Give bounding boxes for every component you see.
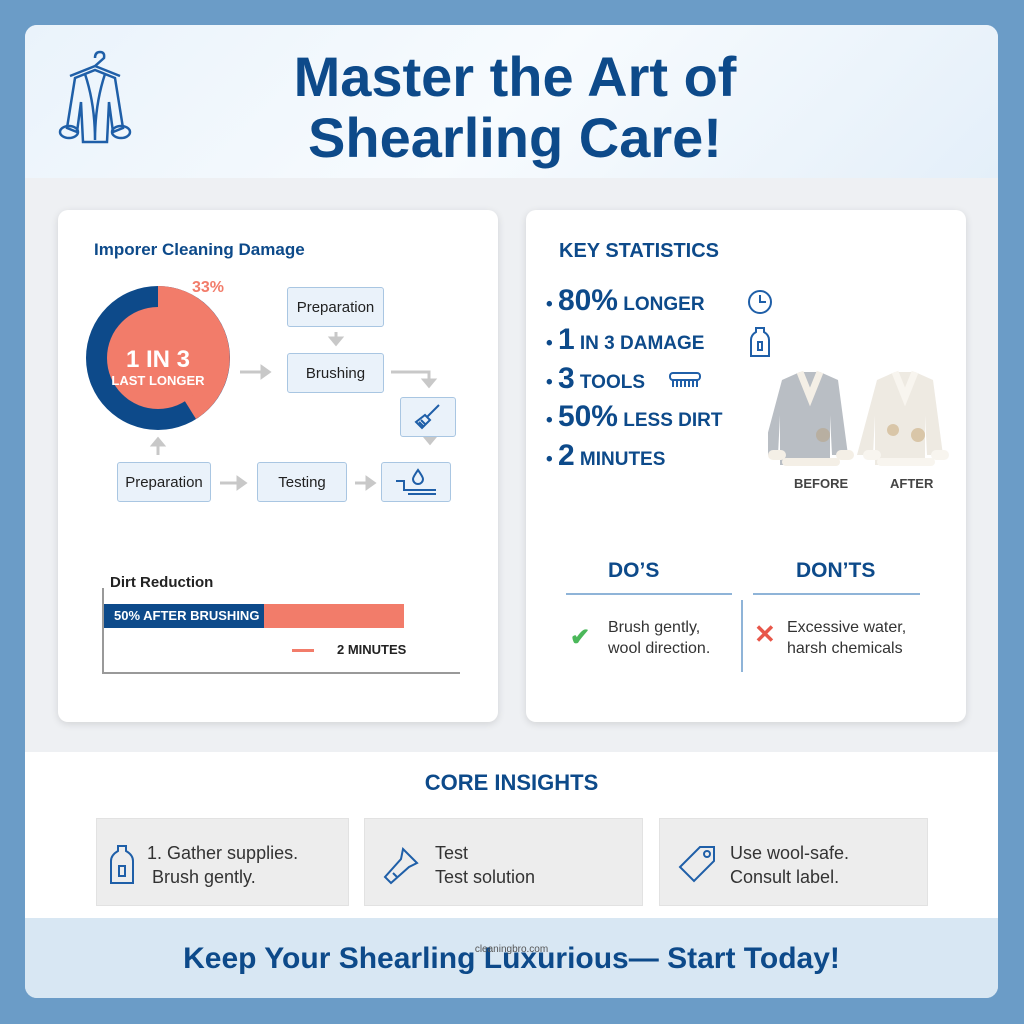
do's and don'ts: ✔	[570, 624, 590, 651]
do's and don'ts: DON’TS	[796, 559, 875, 582]
heading: Imporer Cleaning Damage	[94, 240, 305, 259]
insight 2: Test solution	[435, 867, 535, 887]
icons	[748, 290, 772, 357]
stats list: • 1 IN 3 DAMAGE	[546, 323, 704, 356]
heading: CORE INSIGHTS	[425, 770, 598, 795]
donut chart	[86, 279, 437, 491]
footer call to action: Keep Your Shearling Luxurious— Start Today!	[183, 942, 840, 975]
insight 2: Test	[435, 843, 468, 863]
insight 1: 1. Gather supplies.	[147, 843, 298, 863]
insight 3: Use wool-safe.	[730, 843, 849, 863]
footer call to action: cleaningbro.com	[475, 944, 548, 955]
panel: key statistics: AFTER	[890, 476, 933, 491]
core insights section	[25, 752, 998, 918]
panel: key statistics	[526, 210, 966, 722]
donut chart: LAST LONGER	[111, 373, 205, 388]
bar chart: dirt reduction: 50% AFTER BRUSHING	[114, 608, 259, 623]
stats list: • 80% LONGER	[546, 284, 705, 317]
insight 1: Brush gently.	[152, 867, 256, 887]
donut chart: 1 IN 3	[126, 346, 190, 373]
stats list: • 50% LESS DIRT	[546, 400, 722, 433]
do's and don'ts: ✕	[754, 619, 776, 649]
insight 3	[659, 818, 928, 906]
icon: shearling coat on hanger	[58, 50, 132, 144]
stats list: • 2 MINUTES	[546, 439, 665, 472]
panel: key statistics: BEFORE	[794, 476, 848, 491]
header band	[25, 25, 998, 178]
insight 3: Consult label.	[730, 867, 839, 887]
stats list	[546, 284, 722, 472]
insight 2	[364, 818, 643, 906]
title	[294, 45, 736, 169]
panel: improper cleaning damage: Preparation	[125, 474, 203, 490]
bar chart: dirt reduction	[102, 574, 460, 674]
do's and don'ts: DO’S	[608, 559, 659, 582]
do's and don'ts: wool direction.	[608, 640, 710, 657]
before/after jackets	[768, 371, 949, 466]
panel: improper cleaning damage: Brushing	[306, 364, 365, 382]
footer call to action	[25, 918, 998, 998]
title: Master the Art of	[294, 45, 736, 108]
title: Shearling Care!	[308, 106, 722, 169]
heading: KEY STATISTICS	[559, 240, 719, 262]
stats list: • 3 TOOLS	[546, 362, 645, 395]
bar chart: dirt reduction: 2 MINUTES	[337, 642, 406, 657]
do's and don'ts: harsh chemicals	[787, 640, 903, 657]
flow boxes: Preparation	[297, 298, 374, 316]
panel: improper cleaning damage: Testing	[278, 474, 326, 490]
panel: improper cleaning damage	[58, 210, 498, 722]
do's and don'ts: Brush gently,	[608, 619, 700, 636]
flow boxes	[287, 287, 384, 327]
do's and don'ts	[566, 559, 920, 672]
insight 1	[96, 818, 349, 906]
bar chart: dirt reduction: Dirt Reduction	[110, 574, 213, 591]
donut chart: 33%	[192, 279, 224, 296]
do's and don'ts: Excessive water,	[787, 619, 906, 636]
